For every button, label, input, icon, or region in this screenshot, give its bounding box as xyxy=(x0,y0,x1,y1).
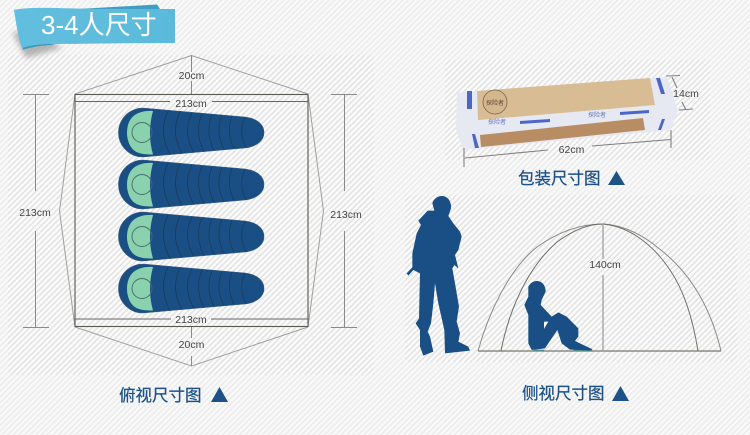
tent height label: 140cm xyxy=(589,259,621,271)
package caption: 包装尺寸图 xyxy=(518,169,600,188)
package box photo: 探险者 xyxy=(488,118,506,126)
dimension labels: 20cm xyxy=(179,70,205,82)
dimension labels: 213cm xyxy=(175,98,207,110)
tent outline xyxy=(60,56,324,366)
ribbon title xyxy=(12,4,175,58)
top view caption: 俯视尺寸图 xyxy=(119,386,202,405)
person silhouette sitting xyxy=(524,281,593,351)
package dimensions xyxy=(464,76,699,167)
person silhouette standing xyxy=(407,196,470,356)
package box photo: 探险者 xyxy=(588,111,606,119)
package dimensions: 62cm xyxy=(559,144,585,156)
package box photo: 探险者 xyxy=(486,99,504,107)
ribbon title text: 3-4人尺寸 xyxy=(41,10,157,40)
package dimensions: 14cm xyxy=(673,88,699,100)
dimension labels: 213cm xyxy=(330,209,362,221)
dimension labels: 20cm xyxy=(179,339,205,351)
sleeping bags xyxy=(118,108,264,313)
side view caption: 侧视尺寸图 xyxy=(522,384,604,403)
dimension labels: 213cm xyxy=(19,207,51,219)
side view tent xyxy=(478,224,721,351)
floor rectangle xyxy=(75,94,308,326)
dimension labels xyxy=(19,70,362,351)
dimension lines xyxy=(23,55,357,366)
package box photo xyxy=(456,77,678,150)
dimension labels: 213cm xyxy=(175,314,207,326)
panel: top view dimensions xyxy=(19,55,362,366)
